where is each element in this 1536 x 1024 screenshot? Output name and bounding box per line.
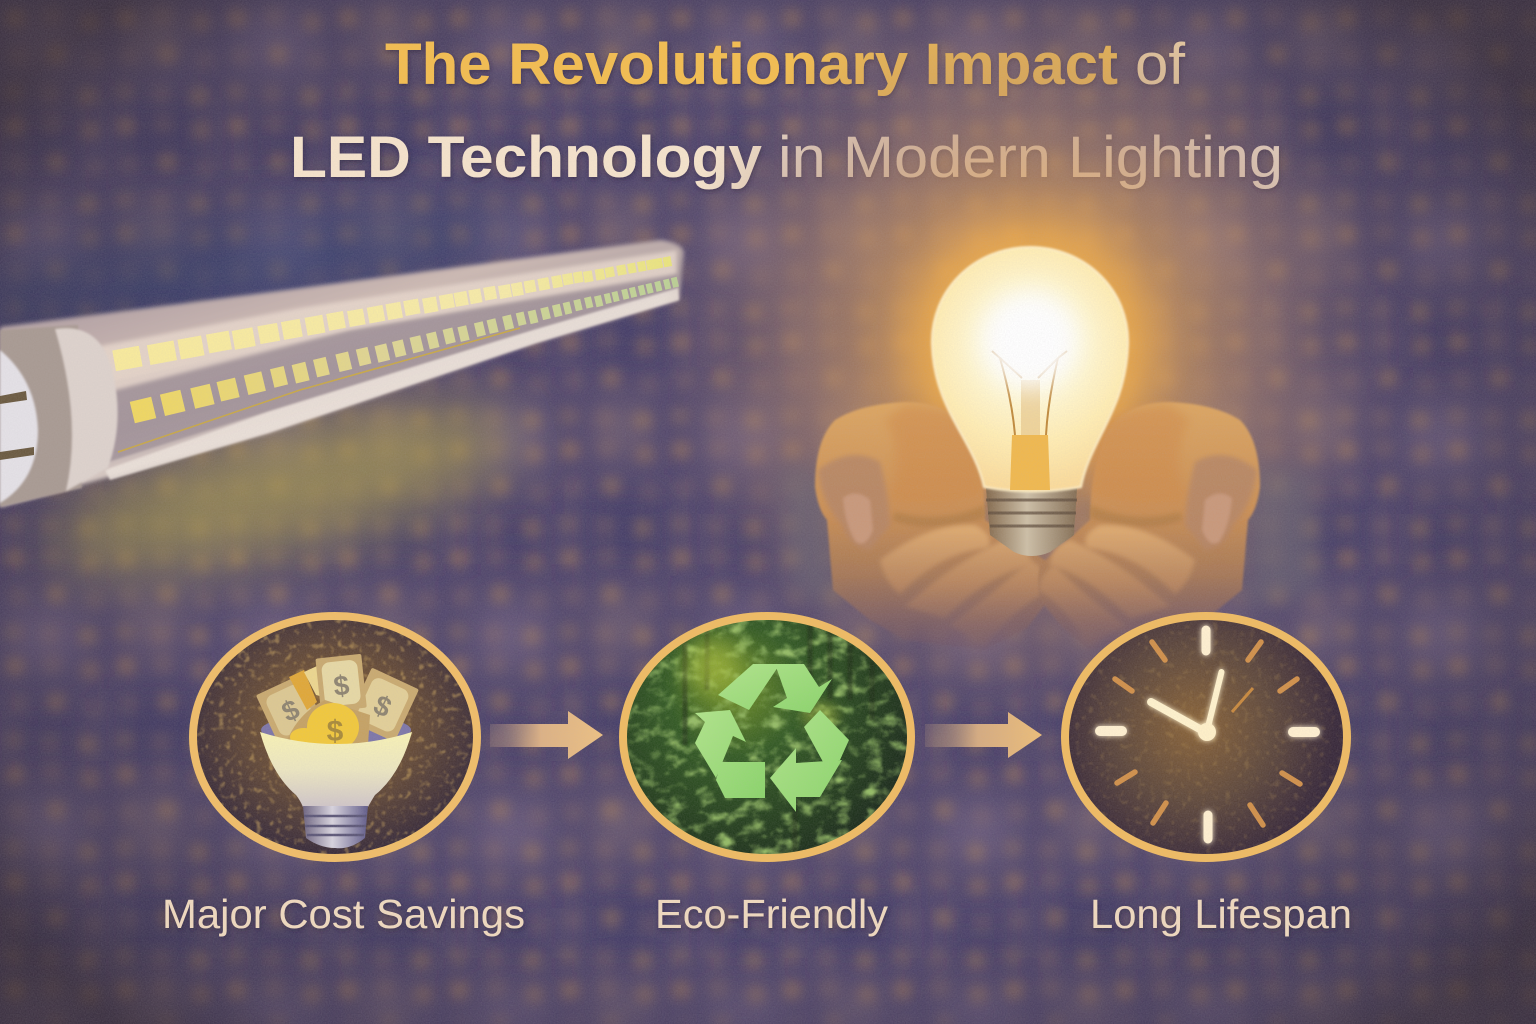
medallion ring: [623, 616, 911, 858]
light bulb glow: [640, 0, 1420, 720]
money bills: [256, 654, 419, 751]
feature: eco-friendly: [623, 616, 911, 860]
bottom LED row: [130, 271, 680, 423]
clock centre: [1198, 723, 1216, 741]
title: [290, 32, 1283, 190]
clock face: [1065, 616, 1347, 858]
top LED row: [112, 250, 673, 371]
filament wires: [992, 351, 1067, 435]
feature labels: [162, 891, 1352, 937]
bill: right: [347, 668, 419, 742]
filament glow: [982, 292, 1078, 388]
feature: long lifespan clock: [1065, 616, 1347, 858]
bill with coin: front: $: [327, 715, 344, 748]
label: major cost savings: Major Cost Savings: [162, 891, 525, 937]
tube gold trace: [118, 328, 520, 452]
title line 2: [290, 125, 1283, 190]
white tube collar: [55, 328, 118, 491]
minor hour ticks: [1115, 642, 1300, 825]
cupped hands holding bulb: [780, 402, 1320, 650]
glass envelope: [932, 247, 1128, 492]
tube bright band behind top LEDs: [100, 250, 677, 392]
recycle arrow: top: [718, 664, 832, 713]
recycle symbol: [695, 664, 849, 812]
tube inner tray: [100, 272, 677, 462]
silver end cap: [0, 325, 82, 507]
title line 1: The Revolutionary Impact: [385, 32, 1118, 97]
arrow: eco to lifespan: [925, 712, 1042, 758]
bill: center: $: [332, 669, 351, 702]
recycle arrow: right: [770, 710, 849, 812]
right hand: [1038, 402, 1260, 650]
left hand: [815, 402, 1053, 650]
title line 1: of: [1135, 32, 1186, 97]
bill: back gold band: [289, 670, 317, 710]
title line 2: in Modern Lighting: [778, 125, 1283, 190]
clock hands: [1151, 672, 1222, 733]
funnel screw base: [303, 806, 368, 848]
major hour ticks: [1100, 630, 1315, 839]
bill: right: $: [369, 689, 397, 724]
light bulb: [932, 247, 1128, 556]
recycle arrow: left: [695, 710, 765, 798]
LED tube light: [0, 240, 684, 507]
foliage: [623, 616, 911, 860]
title line 2: LED Technology: [290, 125, 762, 190]
second hand: [1232, 688, 1253, 712]
screw base: [986, 488, 1077, 556]
bill: left: [256, 674, 325, 746]
funnel bulb body: [260, 732, 412, 807]
label: eco-friendly: Eco-Friendly: [655, 891, 889, 937]
sleeve right: [1245, 468, 1320, 610]
tube lower bright edge: [105, 288, 679, 480]
white end face with label marks: [0, 350, 38, 503]
bill: center: [315, 654, 367, 712]
glass stem: [1010, 380, 1050, 490]
label: long lifespan: Long Lifespan: [1090, 891, 1352, 937]
medallion circle: [193, 616, 477, 858]
forest medallion: [623, 616, 911, 858]
sleeve left: [780, 468, 840, 610]
feature: major cost savings: [193, 616, 477, 858]
sparkle texture: [193, 616, 477, 858]
arrow: savings to eco: [490, 711, 603, 759]
bill: left: $: [277, 693, 305, 728]
tube body: [0, 240, 684, 507]
clock sparkle: [1065, 616, 1347, 858]
funnel interior: [261, 714, 411, 746]
bill with coin: front: [288, 700, 370, 751]
